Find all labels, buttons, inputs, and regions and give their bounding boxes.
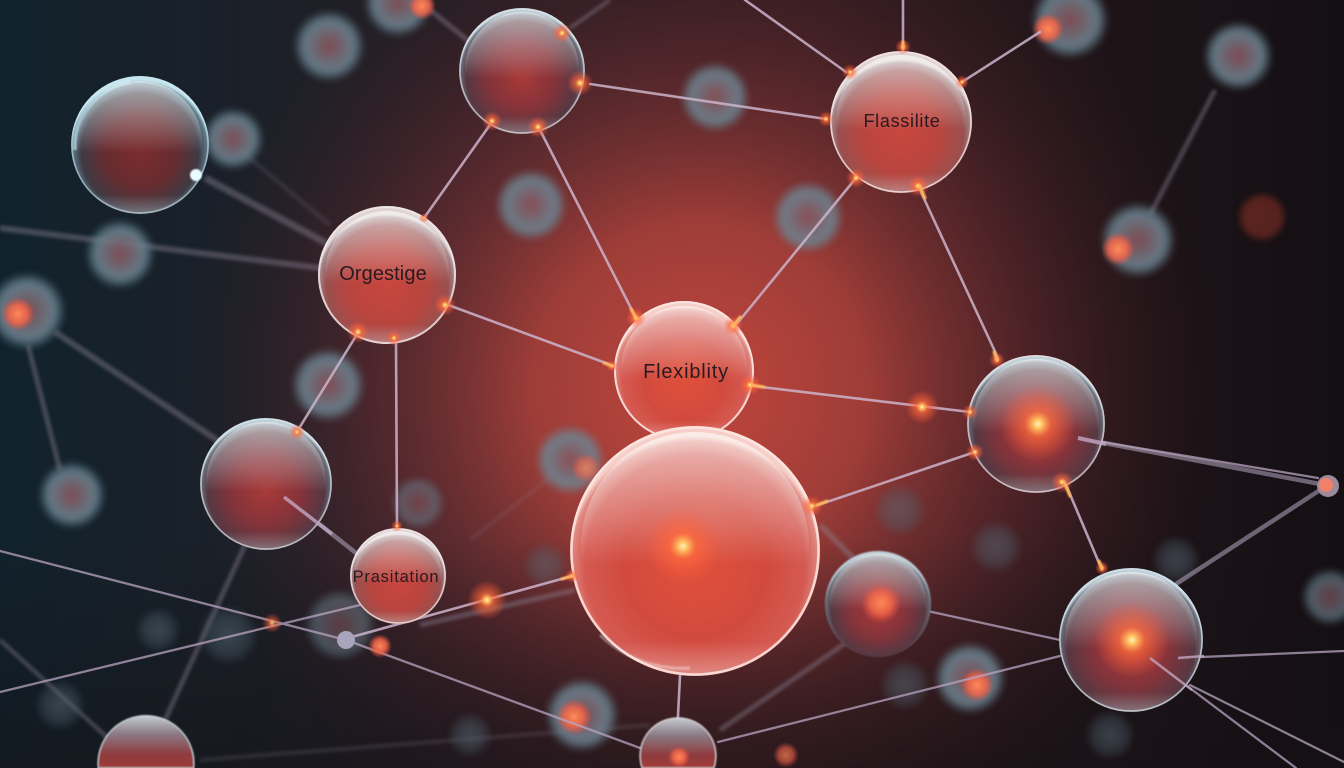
line segments seen through bubbles (284, 438, 1204, 690)
label: Prasitation: Prasitation (353, 568, 439, 586)
bubble: Prasitation (350, 528, 446, 624)
bubble: lower-right glowing (1059, 568, 1203, 712)
label: Flexiblity: Flexiblity (643, 361, 729, 383)
bubble: top centre-left (459, 8, 585, 134)
orange connector stubs (562, 42, 1102, 579)
bubble: bottom centre partial (640, 718, 716, 768)
bubble: lower-left (200, 418, 332, 550)
bubble: right centre glowing (967, 355, 1105, 493)
glowing node points (262, 390, 1339, 658)
bubble: large central (570, 426, 820, 676)
bubble: Orgestige (318, 206, 456, 344)
label: Orgestige: Orgestige (339, 263, 427, 285)
bubble: top-left large (71, 76, 209, 214)
bubble: bottom-left partial (98, 716, 194, 768)
bubble: Flexibility (614, 301, 754, 441)
bubble: mid-right small (825, 551, 931, 657)
label: Flassilite: Flassilite (863, 111, 941, 131)
bubble: Flassilite (830, 51, 972, 193)
connector joints (289, 23, 1109, 583)
